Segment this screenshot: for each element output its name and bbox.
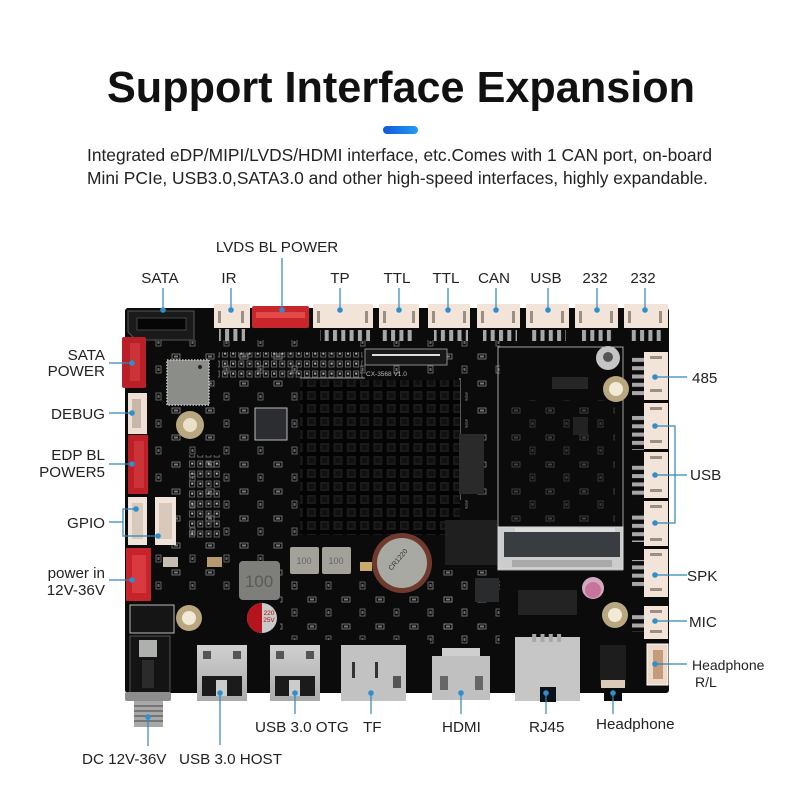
tactile buttons bbox=[163, 557, 222, 567]
label: SPK: SPK bbox=[687, 568, 717, 585]
label: USB right with bracket bbox=[652, 423, 721, 526]
large inductor: 100 bbox=[245, 572, 273, 591]
label: TTL 1 bbox=[383, 270, 411, 313]
headphone jack bbox=[600, 645, 626, 701]
label: RJ45: RJ45 bbox=[529, 719, 564, 736]
label: 232 B bbox=[630, 270, 656, 313]
label: RJ45 bbox=[529, 690, 564, 736]
silkscreen outlines bbox=[300, 347, 623, 570]
connector: GPIO A bbox=[128, 497, 147, 545]
coin battery bbox=[360, 533, 432, 593]
SATA connector bbox=[128, 311, 194, 340]
label: 232 B: 232 bbox=[630, 270, 656, 287]
connector: GPIO B bbox=[155, 497, 176, 545]
control chip bbox=[255, 408, 287, 440]
label: 485 bbox=[652, 370, 717, 387]
small IC bbox=[573, 417, 588, 435]
description text: Integrated eDP/MIPI/LVDS/HDMI interface, etc.Comes with 1 CAN port, on-board bbox=[87, 145, 712, 165]
label: DEBUG bbox=[51, 406, 135, 423]
description text bbox=[87, 145, 712, 188]
connector: SATA power bbox=[122, 337, 146, 388]
label: SATA POWER bbox=[48, 347, 135, 380]
label: USB right with bracket: USB bbox=[690, 467, 721, 484]
mount hole top right bbox=[603, 376, 629, 402]
label: USB 3.0 HOST: USB 3.0 HOST bbox=[179, 751, 282, 768]
header pin rows bbox=[187, 352, 363, 540]
label: Headphone R/L: R/L bbox=[695, 674, 717, 690]
title: Support Interface Expansion bbox=[107, 64, 695, 112]
connector: 232 B bbox=[624, 304, 668, 328]
label: SPK bbox=[652, 568, 717, 585]
label: power in: 12V-36V bbox=[47, 582, 106, 599]
description text: Mini PCIe, USB3.0,SATA3.0 and other high-speed interfaces, highly expandable. bbox=[87, 168, 708, 188]
USB 3.0 OTG port bbox=[270, 645, 320, 701]
mount hole bottom right bbox=[602, 602, 628, 628]
label: USB 3.0 OTG: USB 3.0 OTG bbox=[255, 719, 349, 736]
mini PCIe slot bbox=[498, 527, 623, 569]
label: TF: TF bbox=[363, 719, 382, 736]
label: HDMI bbox=[442, 690, 481, 736]
accent bar bbox=[383, 126, 418, 134]
small IC row bbox=[552, 377, 588, 389]
label: USB 3.0 OTG bbox=[255, 690, 349, 736]
connector: EDP BL power bbox=[128, 435, 148, 494]
electrolytic capacitor: 25V bbox=[263, 617, 275, 624]
label: SATA: SATA bbox=[141, 270, 180, 287]
label: Headphone bbox=[596, 690, 675, 733]
label: HDMI: HDMI bbox=[442, 719, 481, 736]
label: SATA bbox=[141, 270, 180, 313]
screw bbox=[596, 346, 620, 370]
label: MIC: MIC bbox=[689, 614, 717, 631]
TF side IC bbox=[475, 578, 499, 602]
mount hole top left bbox=[176, 411, 204, 439]
SoC side chip bbox=[459, 434, 484, 494]
connector: 485 bbox=[644, 352, 668, 400]
label: 232 A: 232 bbox=[582, 270, 608, 287]
label: TF bbox=[363, 690, 382, 736]
connector: MIC bbox=[644, 606, 668, 639]
label: EDP BL POWER5: POWER5 bbox=[39, 464, 105, 481]
connector: USB A bbox=[644, 403, 668, 449]
coin battery: CR1220 bbox=[388, 548, 410, 572]
TF slot bbox=[341, 645, 406, 701]
label: Headphone: Headphone bbox=[596, 716, 675, 733]
HDMI port bbox=[432, 648, 490, 700]
label: TTL 2 bbox=[432, 270, 460, 313]
label: DEBUG: DEBUG bbox=[51, 406, 105, 423]
label: Headphone R/L bbox=[652, 657, 765, 690]
label: Headphone R/L: Headphone bbox=[692, 657, 765, 673]
DC power jack bbox=[125, 636, 171, 727]
connector: 232 A bbox=[575, 304, 618, 328]
label: SATA POWER: SATA bbox=[68, 347, 106, 364]
connector pins bbox=[219, 329, 664, 632]
label: LVDS BL POWER bbox=[216, 239, 338, 313]
circuit board bbox=[122, 304, 669, 727]
label: power in bbox=[47, 565, 135, 599]
SMD component texture bbox=[150, 340, 615, 650]
power chip bbox=[445, 520, 497, 565]
label: GPIO bbox=[67, 506, 161, 539]
connector: power in bbox=[126, 548, 151, 601]
label: power in: power in bbox=[48, 565, 105, 582]
large inductor bbox=[239, 561, 280, 600]
label: SATA POWER: POWER bbox=[48, 363, 105, 380]
label: USB top bbox=[530, 270, 562, 313]
label: CAN bbox=[478, 270, 510, 313]
display FPC connector bbox=[365, 349, 447, 378]
label: TP: TP bbox=[330, 270, 350, 287]
connector: TTL 2 bbox=[428, 304, 470, 328]
label: 485: 485 bbox=[692, 370, 717, 387]
wifi module bbox=[167, 360, 209, 405]
heatsink bbox=[300, 380, 460, 535]
connector: IR bbox=[214, 304, 250, 328]
connector: TTL 1 bbox=[379, 304, 419, 328]
label: CAN: CAN bbox=[478, 270, 510, 287]
inductor pair: 100 bbox=[296, 556, 312, 566]
battery box bbox=[130, 605, 174, 633]
label: 232 A bbox=[582, 270, 608, 313]
label: EDP BL POWER5: EDP BL bbox=[51, 447, 105, 464]
label: TTL 1: TTL bbox=[383, 270, 411, 287]
inductor pair: 100 bbox=[328, 556, 344, 566]
pink capacitor bbox=[582, 577, 604, 599]
mount hole bottom left bbox=[176, 605, 202, 631]
RJ45 port bbox=[515, 634, 580, 702]
label: DC 12V-36V: DC 12V-36V bbox=[82, 751, 167, 768]
electrolytic capacitor: 220 bbox=[264, 610, 275, 617]
electrolytic capacitor bbox=[247, 603, 277, 633]
label: USB 3.0 HOST bbox=[179, 690, 282, 768]
label: DC 12V-36V bbox=[82, 714, 167, 768]
label: IR: IR bbox=[221, 270, 237, 287]
USB 3.0 host port bbox=[197, 645, 247, 701]
connector: headphone R/L bbox=[647, 644, 668, 685]
connector: USB bbox=[526, 304, 569, 328]
label: TTL 2: TTL bbox=[432, 270, 460, 287]
inductor pair bbox=[290, 547, 351, 574]
label: GPIO: GPIO bbox=[67, 515, 105, 532]
connector: SPK bbox=[644, 549, 668, 597]
label: LVDS BL POWER: LVDS BL POWER bbox=[216, 239, 338, 256]
connector: CAN bbox=[477, 304, 520, 328]
label: USB top: USB bbox=[530, 270, 562, 287]
connector: debug bbox=[128, 393, 147, 434]
audio IC bbox=[518, 590, 577, 615]
label: MIC bbox=[652, 614, 717, 631]
connector: TP bbox=[313, 304, 373, 328]
label: EDP BL POWER5 bbox=[39, 447, 135, 481]
label: IR bbox=[221, 270, 237, 313]
display FPC connector: CX-3568 V1.0 bbox=[366, 371, 407, 378]
connector: LVDS BL power bbox=[252, 306, 309, 328]
connector: USB B bbox=[644, 452, 668, 498]
label: TP bbox=[330, 270, 350, 313]
connector: USB C bbox=[644, 501, 668, 546]
